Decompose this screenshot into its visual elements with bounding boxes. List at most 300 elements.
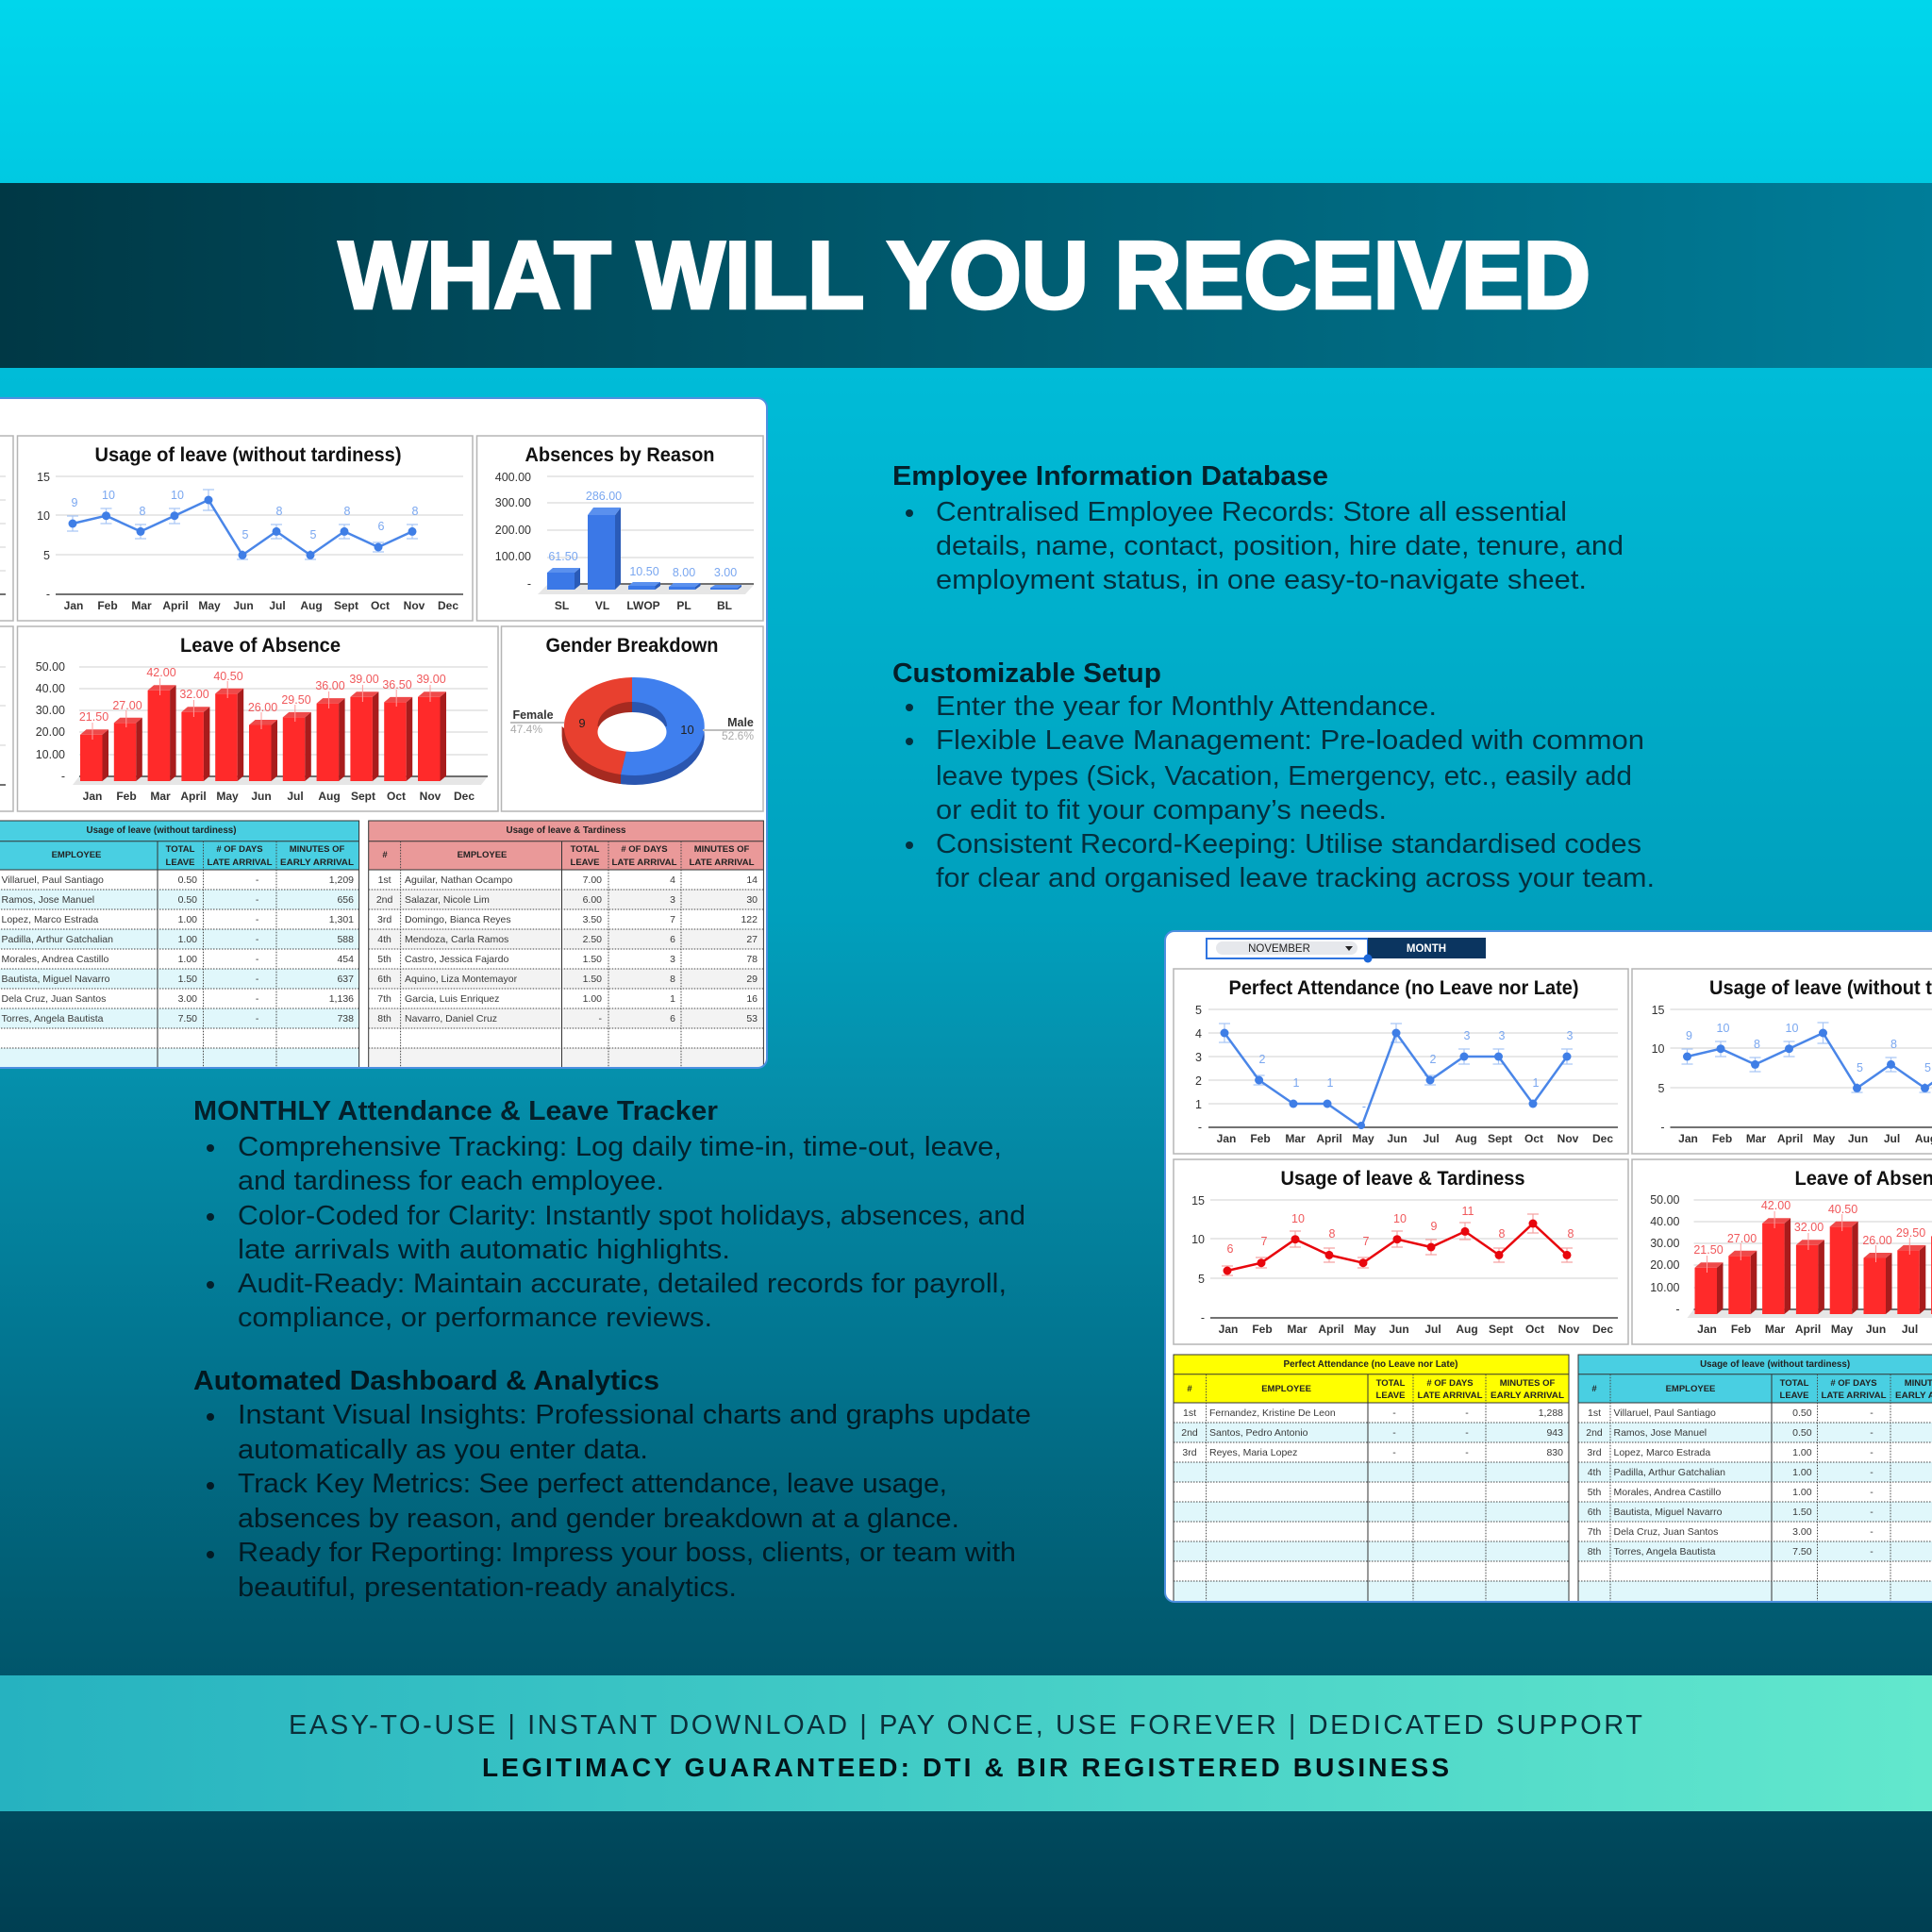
y axis labels: 15 [37,471,50,484]
table rows: - [1392,1427,1396,1439]
month labels: Mar [150,790,171,803]
bars [547,508,741,590]
table rows: 1.00 [178,954,197,965]
column headers [1591,1378,1932,1401]
chart title: Leave of Absence [180,635,341,657]
table rows: - [1465,1447,1469,1458]
column headers: EARLY ARRIVAL [280,858,354,868]
table rows: Fernandez, Kristine De Leon [1209,1407,1336,1419]
month labels: Jun [1848,1132,1868,1145]
data labels: 1 [1533,1076,1540,1090]
text block: customizable setup [892,658,1655,893]
footer benefits line: EASY-TO-USE | INSTANT DOWNLOAD | PAY ONCE, USE FOREVER | DEDICATED SUPPORT [289,1710,1642,1740]
column headers: LEAVE [166,858,194,868]
table rows: - [1870,1507,1874,1518]
month labels: April [180,790,207,803]
table rows: 3.50 [583,914,602,925]
table rows: 53 [746,1013,758,1024]
table rows: 2nd [1586,1427,1603,1439]
table rows: 16 [746,993,758,1005]
month labels [1217,1132,1613,1145]
donut labels: Female [512,708,554,722]
data labels [79,666,446,724]
table rows: 5th [377,954,391,965]
y axis labels: 300.00 [495,496,531,509]
y axis labels: 30.00 [1650,1237,1680,1250]
text block: monthly attendance and leave tracker: Audit-Ready: Maintain accurate, detailed records for payroll, [238,1269,1007,1299]
table rows: Lopez, Marco Estrada [1613,1447,1710,1458]
table: usage of leave without tardiness, cropped copy [1578,1355,1932,1602]
table rows: 7.50 [1792,1546,1812,1557]
table rows: 3.00 [1792,1526,1812,1538]
data labels: 32.00 [179,688,209,701]
y axis labels: - [1660,1121,1664,1134]
month labels: Mar [1765,1323,1785,1336]
data labels: 9 [1686,1029,1692,1042]
table rows: 3 [670,954,675,965]
y axis labels: 10 [1191,1233,1205,1246]
column headers: # [1187,1384,1192,1394]
y axis labels: - [1198,1121,1202,1134]
month labels: Dec [1592,1323,1613,1336]
data labels: 8 [1890,1038,1897,1051]
table rows: 830 [1546,1447,1563,1458]
month labels: Jul [1902,1323,1918,1336]
data labels [1259,1029,1574,1113]
y axis labels: 15 [1652,1004,1665,1017]
table rows: 1,136 [329,993,354,1005]
table rows: 7th [377,993,391,1005]
y axis labels: 5 [1658,1082,1665,1095]
data labels: 40.50 [213,670,243,683]
chart title: Perfect Attendance (no Leave nor Late) [1228,977,1579,999]
data labels: 32.00 [1794,1221,1824,1234]
y axis labels: - [527,577,531,591]
text block: automated dashboard and analytics: beautiful, presentation-ready analytics. [238,1573,737,1603]
table rows: 637 [337,974,354,985]
table rows: 122 [741,914,758,925]
data labels: 10.50 [629,565,659,578]
column headers [383,845,755,865]
data labels: 7 [1261,1235,1268,1248]
month labels: Nov [420,790,441,803]
data labels: 10 [102,489,115,502]
month labels: Sept [1489,1323,1513,1336]
table rows: 2.50 [583,934,602,945]
text block: customizable setup: for clear and organised leave tracking across your team. [936,863,1655,893]
text block: customizable setup: leave types (Sick, Vacation, Emergency, etc., easily add [936,761,1632,791]
month selector: NOVEMBER [1248,943,1310,955]
data labels: 5 [242,528,249,541]
column headers: LATE ARRIVAL [689,858,755,868]
bars [1694,1211,1932,1314]
table rows: - [256,894,259,906]
table rows: Padilla, Arthur Gatchalian [1613,1467,1725,1478]
text block: automated dashboard and analytics: automatically as you enter data. [238,1435,648,1465]
table rows: 14 [746,874,758,886]
table rows [376,874,758,1024]
data labels: 8 [1568,1227,1574,1241]
table rows: Salazar, Nicole Lim [405,894,490,906]
table rows: - [1870,1407,1874,1419]
y axis labels: 15 [1191,1194,1205,1208]
table rows: 1st [1183,1407,1196,1419]
column headers: LEAVE [571,858,599,868]
y axis labels: 5 [1195,1004,1202,1017]
y axis labels: 10.00 [36,748,65,761]
table rows: Garcia, Luis Enriquez [405,993,499,1005]
data labels: 36.00 [315,679,345,692]
data labels: 10 [171,489,184,502]
text block: customizable setup: Consistent Record-Keeping: Utilise standardised codes [936,829,1641,859]
column headers: TOTAL [166,844,195,855]
text block: employee information database: employment status, in one easy-to-navigate sheet. [936,565,1587,595]
month selector [1207,938,1486,962]
y axis labels: 5 [43,549,50,562]
panel: dashboard screenshot left [0,398,767,1068]
footer band [0,1675,1932,1811]
table heading: Perfect Attendance (no Leave nor Late) [1283,1359,1458,1370]
y axis labels: 30.00 [36,704,65,717]
table rows: 7th [1588,1526,1601,1538]
table rows: - [256,954,259,965]
table rows: 588 [337,934,354,945]
table rows: 3rd [1182,1447,1197,1458]
chart: perfect attendance [1174,969,1628,1154]
table rows: - [256,874,259,886]
data line [1683,1028,1932,1092]
column headers: # OF DAYS [1830,1378,1877,1389]
month labels: Jan [83,790,102,803]
table rows: 4 [670,874,675,886]
month labels: Oct [371,599,390,612]
month labels: Dec [438,599,458,612]
table rows: - [1870,1427,1874,1439]
donut labels: 10 [680,723,694,737]
table rows: - [256,993,259,1005]
chart: usage of leave without tardiness, cropped copy [1632,969,1932,1154]
table rows: 1.00 [1792,1467,1812,1478]
table rows: Morales, Andrea Castillo [1613,1487,1721,1498]
text block: monthly attendance and leave tracker: Comprehensive Tracking: Log daily time-in, time-out, leave, [238,1132,1002,1162]
data labels: 9 [72,496,78,509]
data labels: 39.00 [416,673,446,686]
table rows: Castro, Jessica Fajardo [405,954,508,965]
data labels: 26.00 [248,701,277,714]
column headers: # OF DAYS [621,844,668,855]
data labels: 286.00 [586,490,622,503]
table rows: - [1392,1407,1396,1419]
table rows: 1,209 [329,874,354,886]
table rows: 3 [670,894,675,906]
month labels [1219,1323,1613,1336]
month labels: May [198,599,221,612]
month labels: Aug [318,790,341,803]
data labels: 10 [1393,1212,1407,1225]
column headers: TOTAL [1376,1378,1406,1389]
column headers: EARLY ARRIVAL [1491,1391,1564,1401]
data labels: 5 [310,528,317,541]
footer legitimacy line: LEGITIMACY GUARANTEED: DTI & BIR REGISTERED BUSINESS [482,1753,1449,1782]
data labels: 5 [1924,1061,1931,1074]
month labels: Mar [1287,1323,1307,1336]
table rows [2,874,354,1024]
table rows: - [1392,1447,1396,1458]
column headers [52,845,354,865]
data labels: 39.00 [349,673,379,686]
month labels: April [1777,1132,1803,1145]
month labels: Aug [1455,1132,1477,1145]
data labels: 61.50 [548,550,578,563]
column headers: MINUTES OF [290,844,344,855]
data labels [548,490,737,579]
category labels: SL [555,599,569,612]
month labels: Feb [1712,1132,1732,1145]
y axis labels [1191,1194,1205,1324]
table rows: 1.50 [583,974,602,985]
table rows: 8th [1588,1546,1601,1557]
table rows: 1.50 [1792,1507,1812,1518]
y axis labels: 200.00 [495,524,531,537]
month labels: Jun [1387,1132,1407,1145]
table rows: 1.00 [1792,1487,1812,1498]
y axis labels: 10 [37,509,50,523]
data labels: 1 [1293,1076,1300,1090]
data labels: 10 [1291,1212,1305,1225]
table rows: 3rd [377,914,391,925]
column headers: EMPLOYEE [1261,1384,1311,1394]
table rows: 1st [1588,1407,1601,1419]
data labels [72,489,419,541]
table rows: Santos, Pedro Antonio [1209,1427,1308,1439]
table rows: 3rd [1587,1447,1602,1458]
month labels: Jul [1884,1132,1900,1145]
data labels: 40.50 [1828,1203,1857,1216]
data labels: 8 [1754,1038,1760,1051]
table rows: Aguilar, Nathan Ocampo [405,874,513,886]
table rows: 1.00 [178,914,197,925]
month labels: Jan [1697,1323,1717,1336]
donut labels: 52.6% [722,729,754,742]
month labels: Aug [1456,1323,1478,1336]
table rows: 78 [746,954,758,965]
y axis labels: - [1201,1311,1205,1324]
text block: employee information database: details, name, contact, position, hire date, tenure, and [936,531,1624,561]
table rows: 454 [337,954,354,965]
table rows: 7.50 [178,1013,197,1024]
table rows: Reyes, Maria Lopez [1209,1447,1297,1458]
table rows: Padilla, Arthur Gatchalian [2,934,113,945]
table rows: 7 [670,914,675,925]
chart title: Usage of leave (without tardiness) [94,444,402,466]
data labels: - [1362,1100,1366,1113]
month labels: Dec [454,790,475,803]
column headers: LEAVE [1376,1391,1405,1401]
chart: leave of absence [17,626,498,811]
table rows: 1 [670,993,675,1005]
month labels: Feb [1252,1323,1273,1336]
table rows: 8th [377,1013,391,1024]
table rows: 2nd [376,894,393,906]
data labels: 10 [1717,1022,1729,1035]
table rows: 1st [378,874,391,886]
data labels: 3.00 [714,566,737,579]
data labels: 11 [1462,1205,1474,1218]
month labels: Feb [116,790,137,803]
table rows: 4th [377,934,391,945]
text block: monthly attendance and leave tracker: and tardiness for each employee. [238,1166,664,1196]
y axis labels: 3 [1195,1051,1202,1064]
text block: automated dashboard and analytics: Instant Visual Insights: Professional charts and graphs update [238,1400,1031,1430]
table rows: - [1465,1407,1469,1419]
month labels: May [1352,1132,1374,1145]
table rows: Villaruel, Paul Santiago [2,874,104,886]
data labels: 42.00 [146,666,176,679]
y axis labels: 10 [1652,1042,1665,1056]
month labels: Mar [131,599,152,612]
month labels: Dec [1592,1132,1613,1145]
table rows: 27 [746,934,758,945]
data labels: 9 [1431,1220,1438,1233]
data labels: 7 [1363,1235,1370,1248]
table rows: 943 [1546,1427,1563,1439]
text block: customizable setup: Flexible Leave Management: Pre-loaded with common [936,725,1644,756]
text block: monthly attendance and leave tracker: Color-Coded for Clarity: Instantly spot holidays, absences, and [238,1201,1025,1231]
month labels: Jan [1219,1323,1238,1336]
table rows: - [256,914,259,925]
column headers: MINUTES OF [694,844,749,855]
y axis labels: 20.00 [1650,1258,1680,1272]
month labels: Jan [1217,1132,1236,1145]
data labels: 1 [1327,1076,1334,1090]
column headers: # OF DAYS [216,844,263,855]
y axis labels [38,473,49,595]
table rows: 29 [746,974,758,985]
table rows: Torres, Angela Bautista [1613,1546,1716,1557]
category labels [555,602,732,609]
table rows: 6 [670,934,675,945]
month labels: Sept [334,599,358,612]
data labels: 27.00 [1727,1232,1757,1245]
table rows: 7.00 [583,874,602,886]
chart title: Absences by Reason [525,444,715,466]
table rows: 738 [337,1013,354,1024]
text block: monthly attendance and leave tracker [193,1096,1025,1333]
month labels: Feb [1250,1132,1271,1145]
data labels: 29.50 [1896,1226,1925,1240]
y axis labels [36,660,65,783]
table rows: 0.50 [178,894,197,906]
data labels: 8 [140,505,146,518]
chart: gender breakdown [502,626,763,811]
column headers: TOTAL [1780,1378,1809,1389]
error bars [1681,1023,1930,1092]
table rows: Navarro, Daniel Cruz [405,1013,497,1024]
panel: dashboard screenshot right [1165,931,1932,1602]
error bars [67,490,418,559]
table rows: Dela Cruz, Juan Santos [1613,1526,1718,1538]
data labels: 2 [1430,1053,1437,1066]
month labels [64,601,458,611]
floor [73,776,488,785]
month selector: MONTH [1407,943,1446,955]
table rows: 0.50 [1792,1407,1812,1419]
data labels: 8 [276,505,283,518]
month labels: Mar [1285,1132,1306,1145]
table rows: Dela Cruz, Juan Santos [2,993,106,1005]
month labels [83,791,475,802]
y axis labels: - [1675,1303,1679,1316]
y axis labels: 4 [1195,1027,1202,1041]
table rows: 1,288 [1539,1407,1563,1419]
table rows: - [1870,1526,1874,1538]
table heading: Usage of leave (without tardiness) [87,825,236,836]
month labels: Jun [1866,1323,1886,1336]
data labels: 2 [1259,1053,1266,1066]
month labels: April [1318,1323,1344,1336]
column headers: LATE ARRIVAL [208,858,273,868]
month labels: Oct [1524,1132,1543,1145]
data labels: 42.00 [1761,1199,1790,1212]
table rows: Ramos, Jose Manuel [1613,1427,1707,1439]
table rows [1586,1407,1874,1557]
column headers: # OF DAYS [1426,1378,1474,1389]
data line [1223,1219,1572,1275]
text block: customizable setup: or edit to fit your company’s needs. [936,795,1387,825]
month labels: Oct [1525,1323,1544,1336]
month labels: Mar [1746,1132,1766,1145]
y axis labels: 50.00 [36,660,65,674]
y axis labels: 5 [1198,1273,1205,1286]
text block: customizable setup: Enter the year for Monthly Attendance. [936,691,1437,722]
month labels: Jun [251,790,272,803]
y axis labels: 2 [1195,1074,1202,1088]
table rows: - [256,934,259,945]
month labels: May [1831,1323,1853,1336]
y axis labels: - [46,588,50,601]
chart: usage of leave and tardiness [1174,1159,1628,1344]
chart: absences by reason [477,436,763,621]
data labels: 27.00 [112,699,142,712]
chart title: Usage of leave & Tardiness [1281,1168,1524,1190]
y axis labels [1195,1004,1202,1134]
month labels: April [1316,1132,1342,1145]
data labels: 26.00 [1862,1234,1892,1247]
error bars [1219,1024,1573,1085]
table rows: Bautista, Miguel Navarro [2,974,110,985]
table rows: - [1870,1546,1874,1557]
month labels: Jan [64,599,83,612]
table rows: Lopez, Marco Estrada [2,914,98,925]
table rows: Aquino, Liza Montemayor [405,974,518,985]
month labels: Aug [300,599,323,612]
column headers: MINUTES OF [1500,1378,1555,1389]
text block: monthly attendance and leave tracker: MONTHLY Attendance & Leave Tracker [193,1096,718,1126]
table rows: Villaruel, Paul Santiago [1613,1407,1716,1419]
table rows: 5th [1588,1487,1601,1498]
donut labels [510,709,754,740]
table: usage of leave without tardiness [0,821,359,1068]
category labels: VL [595,599,609,612]
data labels: 3 [1567,1029,1574,1042]
chart: leave of absence, cropped copy [1632,1159,1932,1344]
month labels: May [216,790,239,803]
table rows: - [1870,1487,1874,1498]
data labels: 8.00 [673,566,695,579]
table rows: 6th [1588,1507,1601,1518]
category labels: LWOP [626,599,660,612]
table rows: 1.50 [583,954,602,965]
